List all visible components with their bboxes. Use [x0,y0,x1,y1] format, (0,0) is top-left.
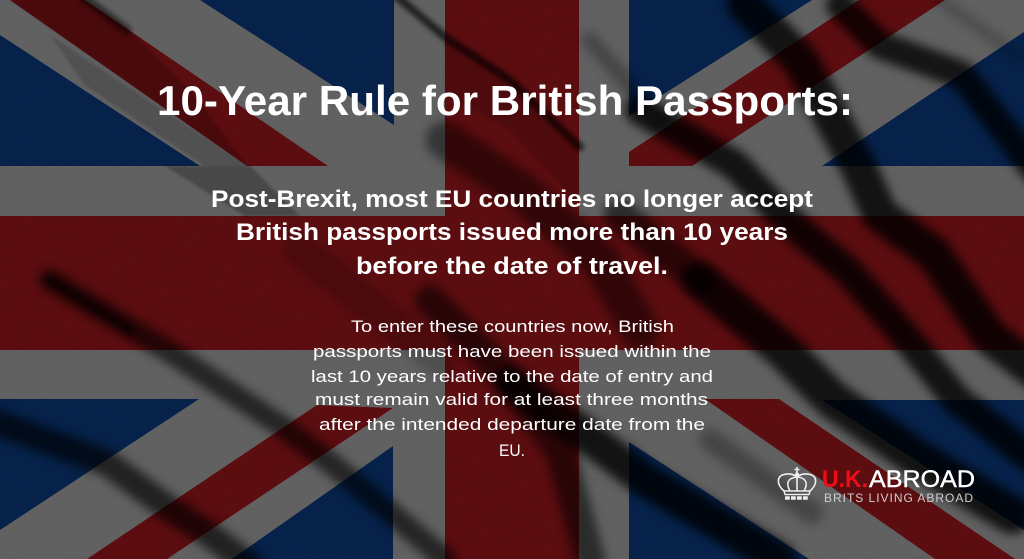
lead paragraph: before the date of travel. [356,253,668,280]
body paragraph: after the intended departure date from the [319,415,705,434]
body paragraph: passports must have been issued within the [313,342,711,361]
icon: crown [778,467,816,498]
logo tagline: BRITS LIVING ABROAD [824,491,973,505]
logo wordmark: U.K. [822,466,868,493]
body paragraph [311,317,713,460]
body paragraph: To enter these countries now, British [351,317,674,336]
body paragraph: last 10 years relative to the date of entry and [311,367,713,386]
logo: U.K. Abroad [778,466,975,505]
body paragraph: EU. [499,441,525,460]
flag: soft fold facets [10,0,579,216]
lead paragraph [211,186,813,280]
body paragraph: must remain valid for at least three months [315,390,708,409]
title: 10-Year Rule for British Passports: [157,77,853,124]
lead paragraph: British passports issued more than 10 years [236,219,788,246]
logo: U.K. Abroad: ABROAD [869,466,975,493]
lead paragraph: Post-Brexit, most EU countries no longer accept [211,186,813,213]
